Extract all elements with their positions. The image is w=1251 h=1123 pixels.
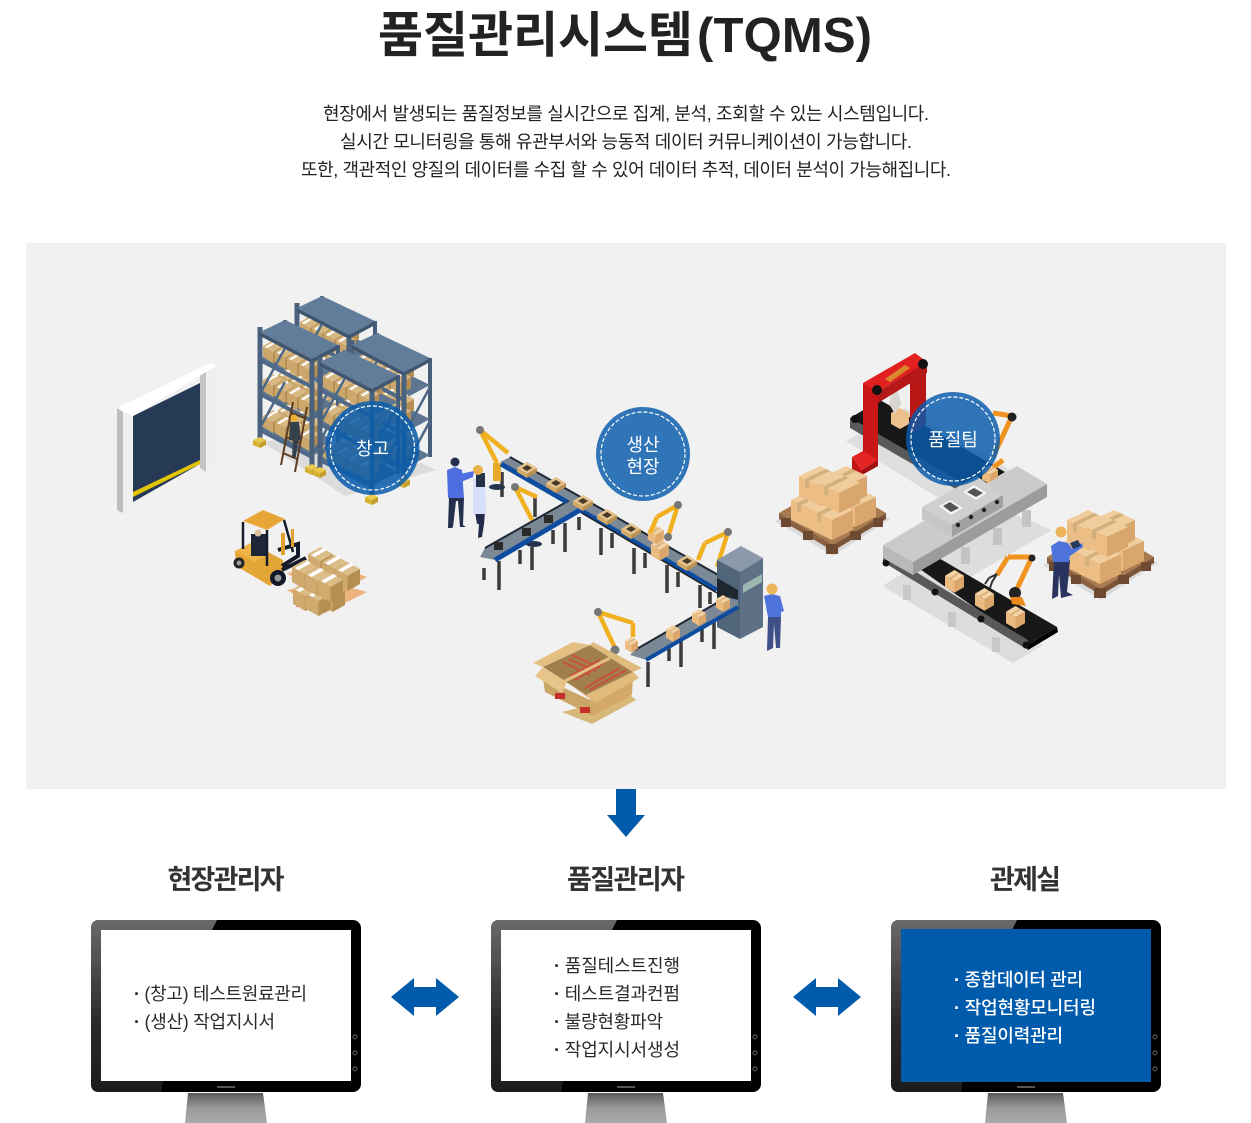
monitor: quality manager: · 테스트결과컨펌 [554,984,680,1004]
icon: worker at machine [764,584,784,651]
icon: people talking [447,458,486,538]
gantry inspection conveyor [846,353,1010,505]
icon: forklift [234,510,306,586]
panel: factory illustration [26,243,1226,789]
intro text: 또한, 객관적인 양질의 데이터를 수집 할 수 있어 데이터 추적, 데이터 분석이 가능해집니다. [301,160,951,180]
badge: quality team [906,392,1000,486]
monitor: quality manager: · 품질테스트진행 [554,956,680,976]
icon: pallet of boxes [287,547,367,616]
title: 품질관리시스템 [378,9,693,63]
monitor: site manager [91,920,361,1123]
monitor: control room: · 품질이력관리 [954,1026,1063,1046]
lower inspection machine [882,466,1058,663]
title [378,9,872,63]
monitor: quality manager: · 불량현황파악 [554,1012,663,1032]
arrow: down [607,789,645,837]
monitor: control room: · 종합데이터 관리 [954,970,1083,990]
title: (TQMS) [697,9,872,63]
monitor: quality manager: · 작업지시서생성 [554,1040,680,1060]
monitor: site manager: · (생산) 작업지시서 [134,1012,275,1032]
monitor: quality manager [491,920,761,1123]
monitor: control room: · 작업현황모니터링 [954,998,1096,1018]
pallet stack left [775,466,890,556]
icon: worker on ladder [281,402,307,472]
badge: production site: 현장 [626,457,660,477]
chart: production conveyor line [476,426,763,687]
heading: quality manager: 품질관리자 [567,865,685,895]
badge: warehouse [326,401,420,495]
arrow: two-way left [391,978,459,1016]
warehouse racks [253,296,436,505]
icon: dock door [117,363,216,513]
heading: control room: 관제실 [990,865,1061,895]
badge: quality team: 품질팀 [928,430,978,450]
monitor: site manager: · (창고) 테스트원료관리 [134,984,307,1004]
badge: production site: 생산 [626,435,660,455]
intro text: 현장에서 발생되는 품질정보를 실시간으로 집계, 분석, 조회할 수 있는 시스템입니다. [323,104,929,124]
badge: production site [596,407,690,501]
icon: open shipping box [533,642,642,724]
monitor: control room [891,920,1161,1123]
icon: robot arm packing box [594,608,638,654]
icon: worker with tablet [1051,526,1083,599]
icon: orange robot over belt [985,554,1036,606]
pallet stack right [1043,510,1158,600]
badge: warehouse: 창고 [356,439,389,459]
heading: site manager: 현장관리자 [168,865,285,895]
intro text: 실시간 모니터링을 통해 유관부서와 능동적 데이터 커뮤니케이션이 가능합니다. [340,132,912,152]
arrow: two-way right [793,978,861,1016]
intro text [301,104,951,180]
icon: orange robot arm [982,412,1016,484]
